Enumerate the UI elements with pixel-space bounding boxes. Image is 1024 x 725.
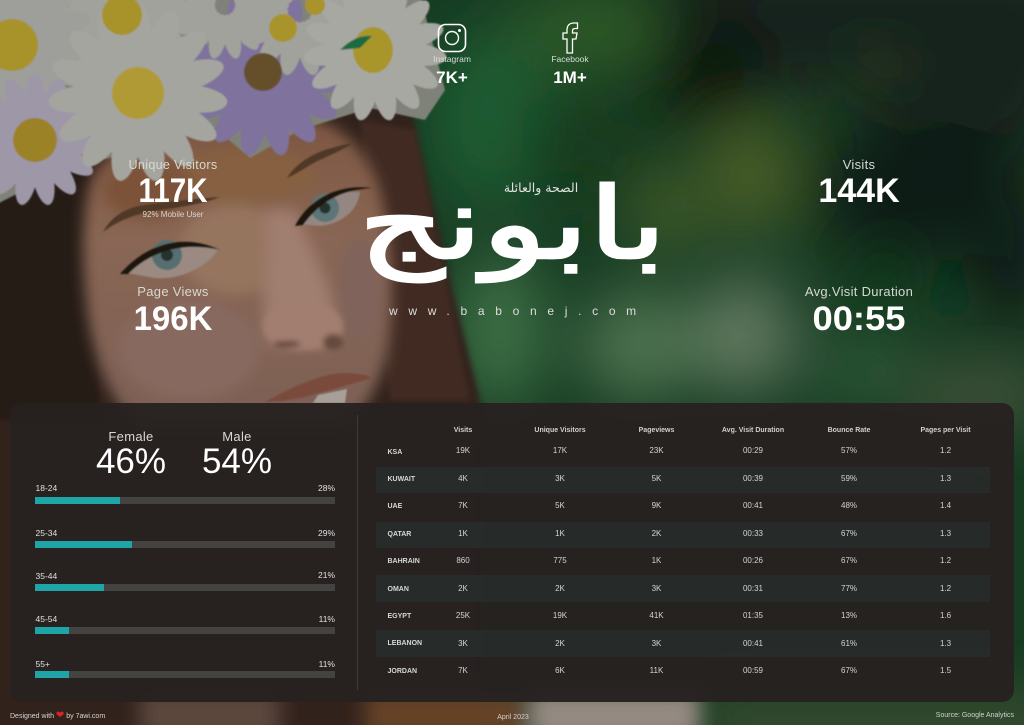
table: country metrics: KSA [388,449,402,456]
table: country metrics: 13% [841,611,857,620]
table: country metrics: 19K [553,611,567,620]
label: Unique Visitors [129,157,217,172]
table: country metrics: 6K [555,666,565,675]
table: country metrics: BAHRAIN [388,558,420,565]
table: country metrics: 59% [841,474,857,483]
table: country metrics: 2K [652,529,661,538]
35-44 bar [34,584,335,591]
value: 00:55 [812,300,906,338]
table: country metrics: 1.2 [940,556,951,565]
table: country metrics: 4K [458,474,468,483]
social: Facebook [551,22,589,87]
table: country metrics: 77% [841,584,857,593]
value: 117K [138,172,208,210]
18-24 label: 18-24 [36,483,57,493]
female value: 46% [96,442,166,481]
25-34 value: 29% [318,528,335,538]
male label: Male [222,429,252,444]
social: Instagram [433,24,471,87]
table: country metrics: 1K [555,529,565,538]
label: Avg.Visit Duration [805,284,913,299]
table: country metrics: 00:41 [743,501,763,510]
male value: 54% [202,442,272,481]
table: country metrics: 61% [841,639,857,648]
face [83,112,392,430]
table: country metrics: LEBANON [388,640,422,647]
table: country metrics: OMAN [388,586,409,593]
table: country metrics: 19K [456,446,470,455]
table: country metrics: 9K [652,501,661,510]
table: country metrics: 1.5 [940,666,951,675]
value: 144K [818,172,900,210]
table: country metrics: 57% [841,446,857,455]
table: country metrics: 1K [458,529,468,538]
table: country metrics: Pageviews [639,427,674,434]
55+ value: 11% [319,659,335,669]
table: country metrics: 00:41 [743,639,763,648]
Instagram label: Instagram [433,54,471,64]
table: country metrics: 2K [458,584,468,593]
25-34 label: 25-34 [36,528,57,538]
45-54 label: 45-54 [36,614,57,624]
bottom strip below panel [140,690,700,725]
table: country metrics: Bounce Rate [828,427,870,434]
female label: Female [108,429,154,444]
table: country metrics: 7K [458,666,468,675]
table: country metrics: 1.2 [940,446,951,455]
panel: audience and countries [10,403,1014,702]
Facebook value: 1M+ [553,68,587,87]
label: Visits [843,157,875,172]
Facebook label: Facebook [551,54,589,64]
table: country metrics: 2K [555,584,565,593]
table: country metrics: 3K [652,639,661,648]
stat: average visit duration [805,284,913,338]
table: country metrics: QATAR [388,531,411,538]
table: country metrics: Visits [454,427,472,434]
table: country metrics: 23K [649,446,664,455]
table: country metrics: KUWAIT [388,476,415,483]
table: country metrics: 5K [555,501,565,510]
55+ bar [34,671,335,678]
table: country metrics: 01:35 [743,611,763,620]
table: country metrics: Pages per Visit [920,427,971,434]
table: country metrics: 17K [553,446,567,455]
facial features [103,143,372,403]
footer: date: April 2023 [497,714,529,721]
table: country metrics: 11K [650,666,663,675]
stat: visits [818,157,900,210]
table: country metrics: Avg. Visit Duration [722,427,784,434]
35-44 label: 35-44 [36,571,57,581]
bar chart: age groups [35,483,335,678]
hair [0,100,480,725]
table: country metrics: 25K [456,611,470,620]
table: country metrics: 7K [458,501,468,510]
stat: unique visitors [129,157,217,219]
tagline: الصحة والعائلة [504,180,578,196]
table: country metrics: 00:39 [743,474,763,483]
icon: Instagram [438,24,466,52]
value: 196K [134,300,212,338]
table: country metrics: 00:29 [743,446,763,455]
footer: source: Source: Google Analytics [936,712,1014,719]
table: country metrics: 67% [841,556,857,565]
table: country metrics: 5K [652,474,661,483]
table: country metrics: JORDAN [388,668,417,675]
table: country metrics: 1.6 [940,611,951,620]
18-24 value: 28% [318,483,335,493]
website url: www.babonej.com [389,304,647,318]
table: country metrics: 00:59 [743,666,763,675]
table: country metrics: 1.3 [940,529,951,538]
icon: Facebook [562,22,578,54]
footer: designer credit: Designed with ❤ by 7awi.com [10,710,105,721]
45-54 bar [34,627,335,634]
panel divider [357,415,358,690]
table: country metrics: 3K [458,639,468,648]
25-34 bar [34,541,335,548]
table: country metrics: 1.2 [940,584,951,593]
stat: page views [134,284,212,338]
table: country metrics: 3K [555,474,565,483]
table: country metrics: 1.3 [940,474,951,483]
table: country metrics: UAE [388,503,402,510]
table: country metrics: 48% [841,501,857,510]
mobile note: 92% Mobile User [143,210,203,219]
flower crown [0,0,448,207]
table: country metrics: 00:33 [743,529,763,538]
table: country metrics: 67% [841,666,857,675]
table: country metrics: 2K [555,639,565,648]
table: country metrics: 860 [456,556,470,565]
wordmark: بابونج [359,166,666,283]
table: country metrics: 41K [649,611,664,620]
table: country metrics: 3K [652,584,661,593]
table: country metrics: 00:31 [743,584,763,593]
table: country metrics: Unique Visitors [534,427,586,434]
18-24 bar [34,497,335,504]
45-54 value: 11% [319,614,335,624]
table: country metrics: EGYPT [388,613,411,620]
table: country metrics: 1.3 [940,639,951,648]
gender split [96,429,272,481]
table: country metrics: 1.4 [940,501,951,510]
label: Page Views [137,284,209,299]
35-44 value: 21% [318,570,335,580]
table: country metrics: 1K [652,556,661,565]
Instagram value: 7K+ [436,68,468,87]
table: country metrics: 00:26 [743,556,763,565]
table: country metrics: 775 [553,556,567,565]
logo: Arabic wordmark with tagline [359,166,666,284]
55+ label: 55+ [36,659,50,669]
table: country metrics: 67% [841,529,857,538]
